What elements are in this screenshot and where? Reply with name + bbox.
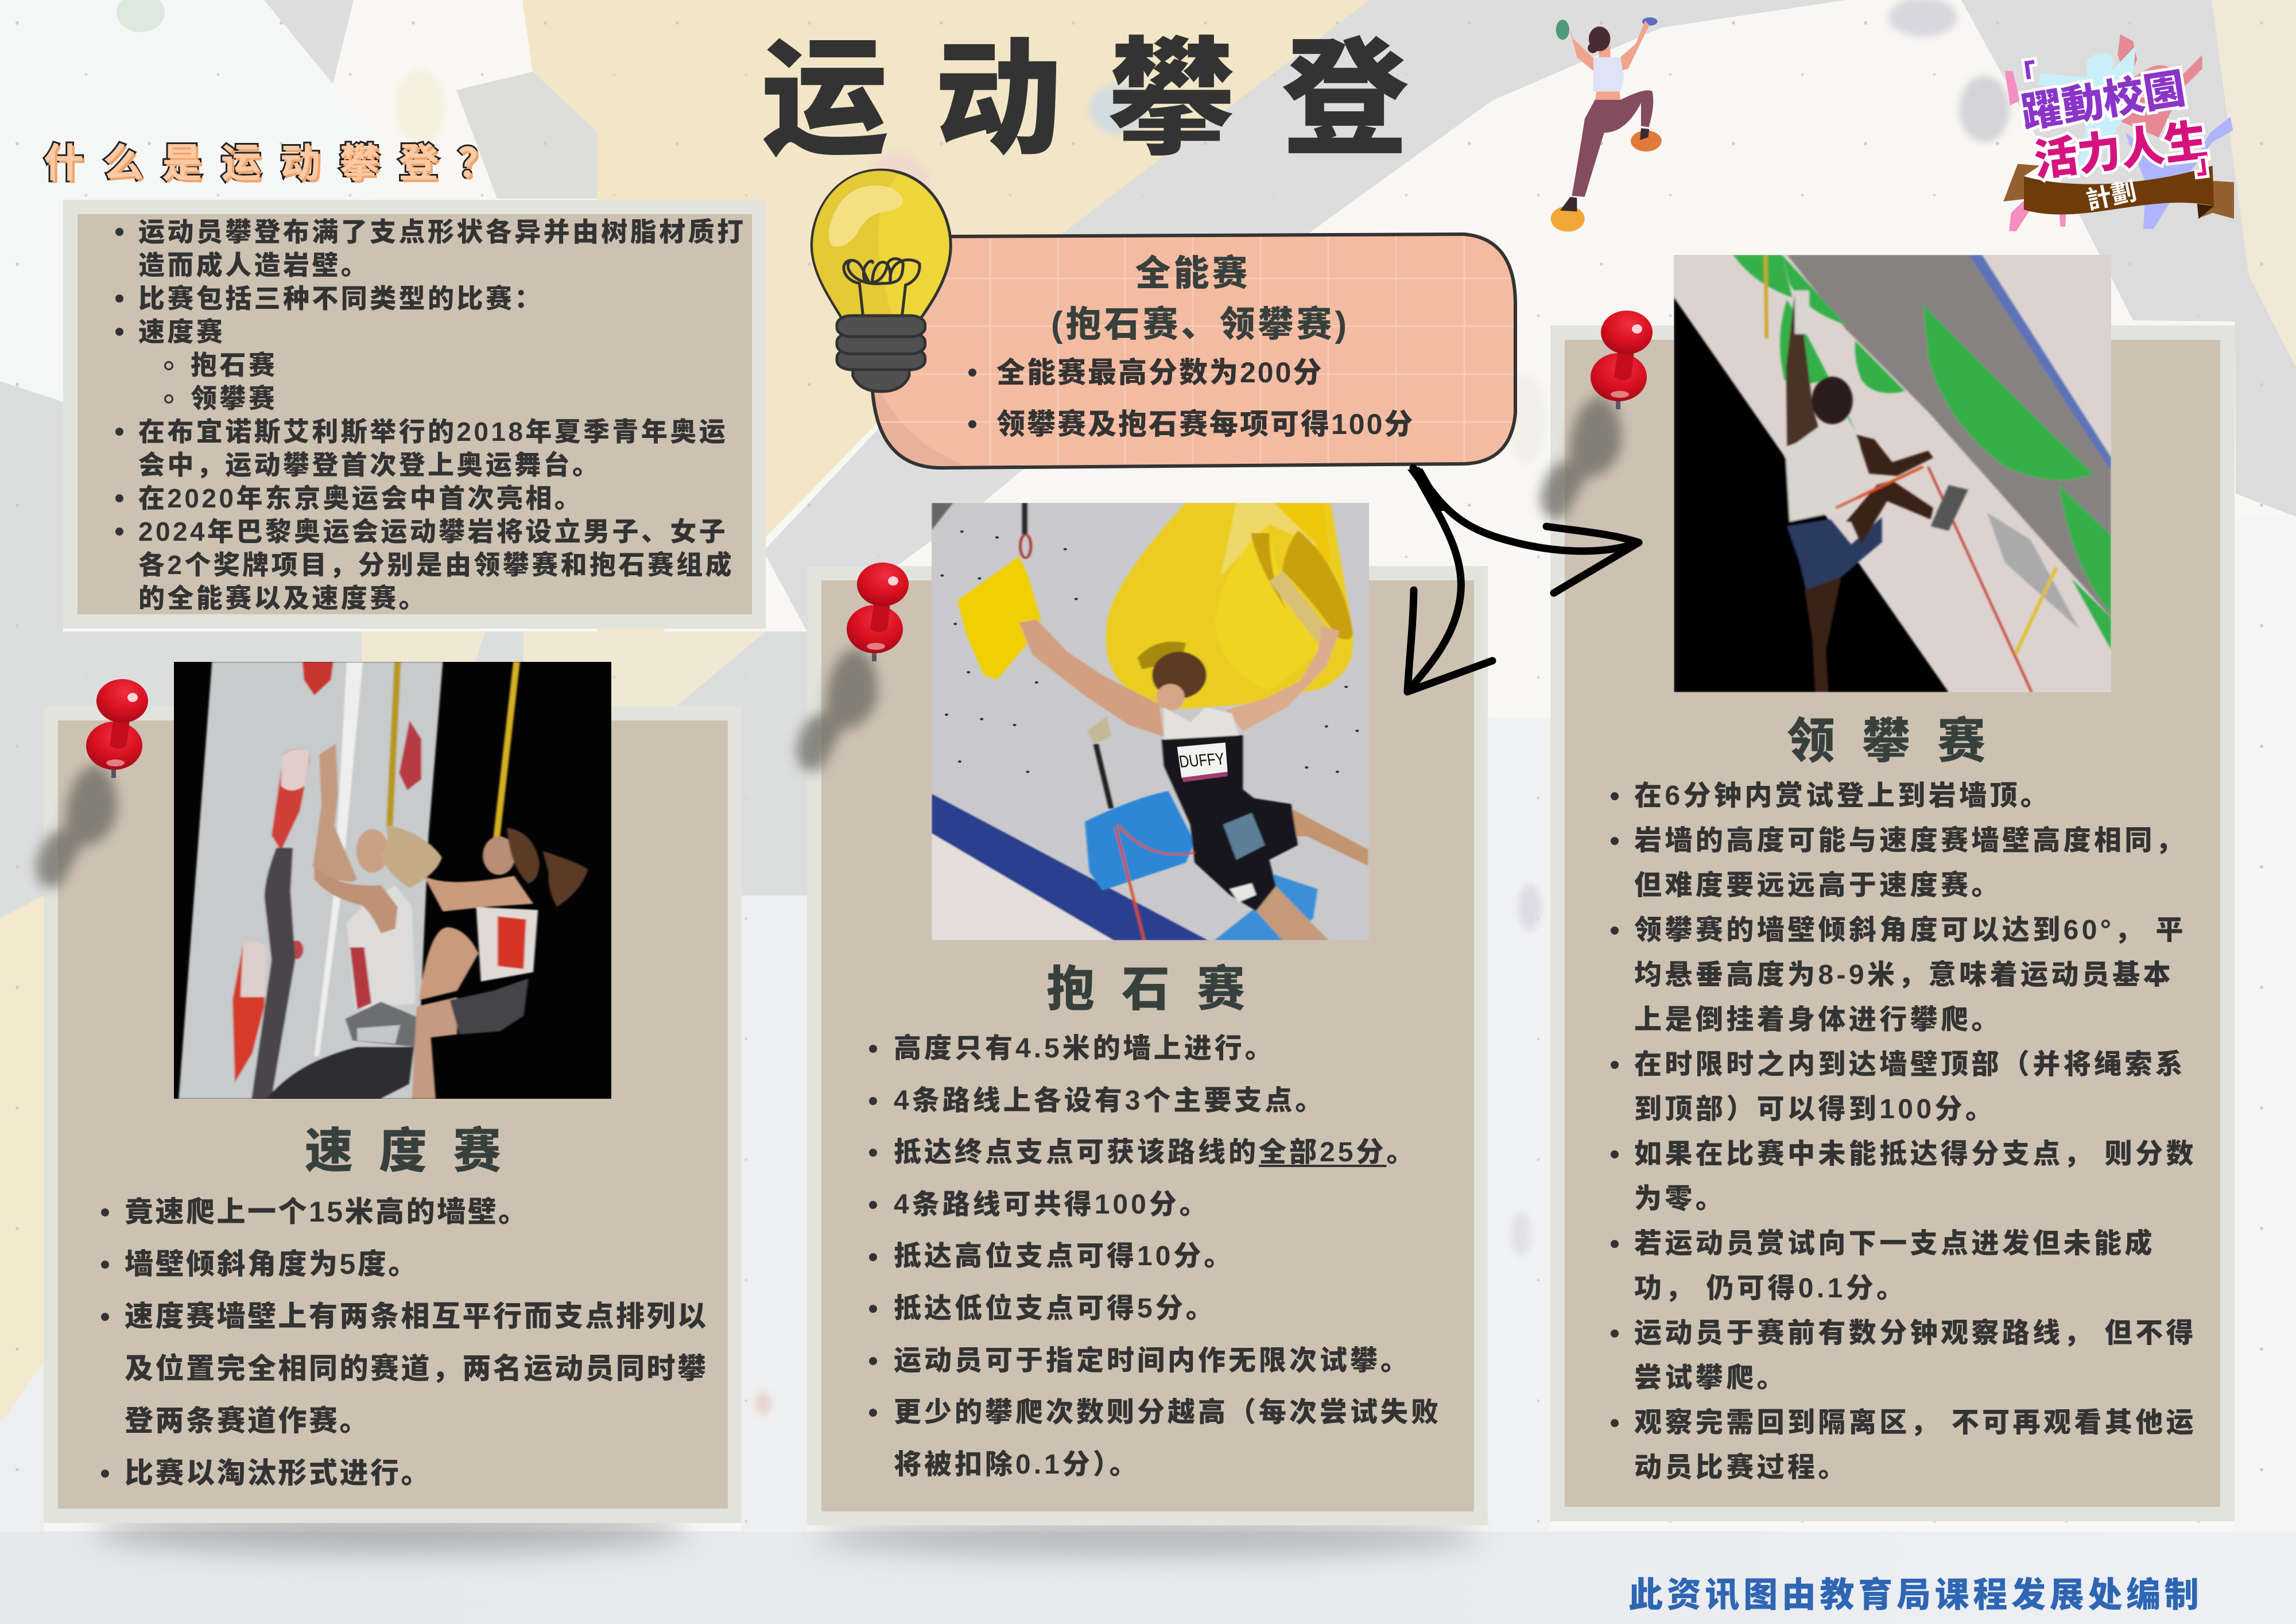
photo: boulderer on yellow holds	[932, 503, 1369, 940]
text block: speed rules: 登两条赛道作赛。	[125, 1405, 370, 1437]
logo: campus programme badge: 躍動校園	[2018, 65, 2189, 137]
text block: lead rules: 若运动员赏试向下一支点进发但未能成	[1634, 1228, 2155, 1259]
text block: bouldering rules: 抵达低位支点可得5分。	[894, 1293, 1216, 1324]
heading: bouldering: 抱石赛	[1046, 962, 1272, 1016]
panel: speed climbing	[44, 706, 742, 1523]
arrow: to bouldering panel	[1401, 462, 1504, 700]
text block: speed rules: 速度赛墙壁上有两条相互平行而支点排列以	[125, 1300, 708, 1332]
title: 运动攀登	[761, 29, 1455, 171]
callout bullets: 全能赛最高分数为200分	[996, 356, 1323, 389]
callout heading: 全能赛	[1135, 254, 1250, 293]
text block: introduction bullets: 速度赛	[138, 317, 225, 347]
text block: lead rules: 在时限时之内到达墙壁顶部（并将绳索系	[1634, 1049, 2186, 1080]
footer credit: 此资讯图由教育局课程发展处编制	[1628, 1576, 2203, 1614]
text block: lead rules: 动员比赛过程。	[1634, 1452, 1849, 1483]
text block: introduction bullets: 运动员攀登布满了支点形状各异并由树脂材质打	[138, 217, 746, 247]
logo: campus programme badge: 計劃	[2084, 177, 2139, 215]
text block: lead rules: 功， 仍可得0.1分。	[1634, 1273, 1907, 1304]
text block: bouldering rules: 4条路线上各设有3个主要支点。	[894, 1086, 1325, 1116]
heading: lead: 领攀赛	[1787, 714, 2012, 768]
text block: introduction bullets: 的全能赛以及速度赛。	[138, 583, 428, 613]
icon: pin on speed panel	[0, 660, 172, 982]
text block: speed rules: 墙壁倾斜角度为5度。	[125, 1248, 419, 1280]
text block: lead rules: 运动员于赛前有数分钟观察路线， 但不得	[1634, 1318, 2197, 1348]
icon: pin on lead panel	[1510, 293, 1670, 614]
text block: speed rules: 及位置完全相同的赛道，两名运动员同时攀	[125, 1352, 708, 1385]
text block: bouldering rules: 抵达终点支点可获该路线的全部25分。	[894, 1137, 1417, 1168]
arrow: to lead panel	[1412, 462, 1647, 600]
photo: lead climber on overhang	[1674, 255, 2111, 692]
logo: campus programme badge: 「	[2006, 59, 2039, 94]
text block: lead rules: 为零。	[1634, 1184, 1726, 1214]
text block: introduction bullets	[115, 217, 746, 613]
text block: lead rules: 但难度要远远高于速度赛。	[1634, 870, 2002, 901]
logo: campus programme badge: 活力人生	[2031, 116, 2210, 185]
callout heading: (抱石赛、领攀赛)	[1051, 305, 1349, 344]
text block: introduction bullets: 2024年巴黎奥运会运动攀岩将设立男子、女子	[138, 517, 728, 546]
logo: campus programme badge: 」	[2194, 147, 2224, 180]
text block: bouldering rules	[894, 1023, 1441, 1491]
callout heading	[1051, 254, 1349, 344]
text block: introduction bullets: 会中，运动攀登首次登上奥运舞台。	[138, 450, 601, 480]
callout box and bulb icon	[810, 169, 1517, 470]
text block: introduction bullets: 领攀赛	[191, 383, 277, 413]
panel: lead climbing	[1550, 325, 2235, 1521]
text block: lead rules: 均悬垂高度为8-9米，意味着运动员基本	[1634, 960, 2174, 990]
callout bullets	[968, 356, 1414, 440]
icon: pin on bouldering panel	[763, 545, 930, 867]
logo: campus programme badge	[2003, 34, 2234, 231]
callout: combined event with light bulb	[810, 169, 1517, 470]
text block: introduction bullets: 各2个奖牌项目，分别是由领攀赛和抱石赛组成	[138, 550, 734, 580]
text block: lead rules: 到顶部）可以得到100分。	[1634, 1094, 1996, 1125]
text block: bouldering rules: 更少的攀爬次数则分越高（每次尝试失败	[894, 1397, 1441, 1428]
callout bullets: 领攀赛及抱石赛每项可得100分	[996, 408, 1414, 440]
text block: introduction bullets: 在2020年东京奥运会中首次亮相。	[138, 483, 583, 513]
photo: two speed climbers	[174, 662, 611, 1099]
text block: lead rules: 岩墙的高度可能与速度赛墙壁高度相同，	[1634, 825, 2186, 856]
text block: lead rules: 如果在比赛中未能抵达得分支点， 则分数	[1634, 1139, 2197, 1169]
text block: speed rules: 比赛以淘汰形式进行。	[125, 1457, 432, 1489]
icon: woman climber	[1551, 17, 1662, 232]
text block: bouldering rules: 将被扣除0.1分）。	[894, 1449, 1140, 1480]
heading: what is sport climbing: 什么是运动攀登？	[44, 141, 517, 185]
text block: lead rules: 上是倒挂着身体进行攀爬。	[1634, 1005, 2002, 1035]
text block: bouldering rules: 高度只有4.5米的墙上进行。	[894, 1033, 1275, 1064]
text block: speed rules: 竟速爬上一个15米高的墙壁。	[125, 1196, 529, 1228]
text block: bouldering rules: 抵达高位支点可得10分。	[894, 1241, 1234, 1272]
text block: bouldering rules: 4条路线可共得100分。	[894, 1189, 1210, 1220]
text block: lead rules: 观察完需回到隔离区， 不可再观看其他运	[1634, 1408, 2197, 1438]
heading: speed: 速度赛	[305, 1124, 527, 1178]
text block: lead rules	[1634, 774, 2197, 1490]
text block: introduction bullets: 比赛包括三种不同类型的比赛：	[138, 284, 544, 313]
text block: speed rules	[101, 1196, 708, 1489]
text block: bouldering rules: 运动员可于指定时间内作无限次试攀。	[894, 1346, 1411, 1376]
panel: bouldering	[807, 566, 1488, 1525]
text block: introduction bullets: 在布宜诺斯艾利斯举行的2018年夏季青年奥运	[138, 417, 728, 447]
text block: lead rules: 在6分钟内赏试登上到岩墙顶。	[1634, 781, 2051, 811]
text block: lead rules: 尝试攀爬。	[1634, 1363, 1787, 1393]
photo: boulderer on yellow holds: DUFFY	[1178, 749, 1226, 771]
panel: introduction	[63, 200, 766, 629]
text block: introduction bullets: 抱石赛	[191, 350, 277, 380]
text block: introduction bullets: 造而成人造岩壁。	[138, 250, 370, 280]
text block: lead rules: 领攀赛的墙壁倾斜角度可以达到60°， 平	[1634, 915, 2186, 945]
